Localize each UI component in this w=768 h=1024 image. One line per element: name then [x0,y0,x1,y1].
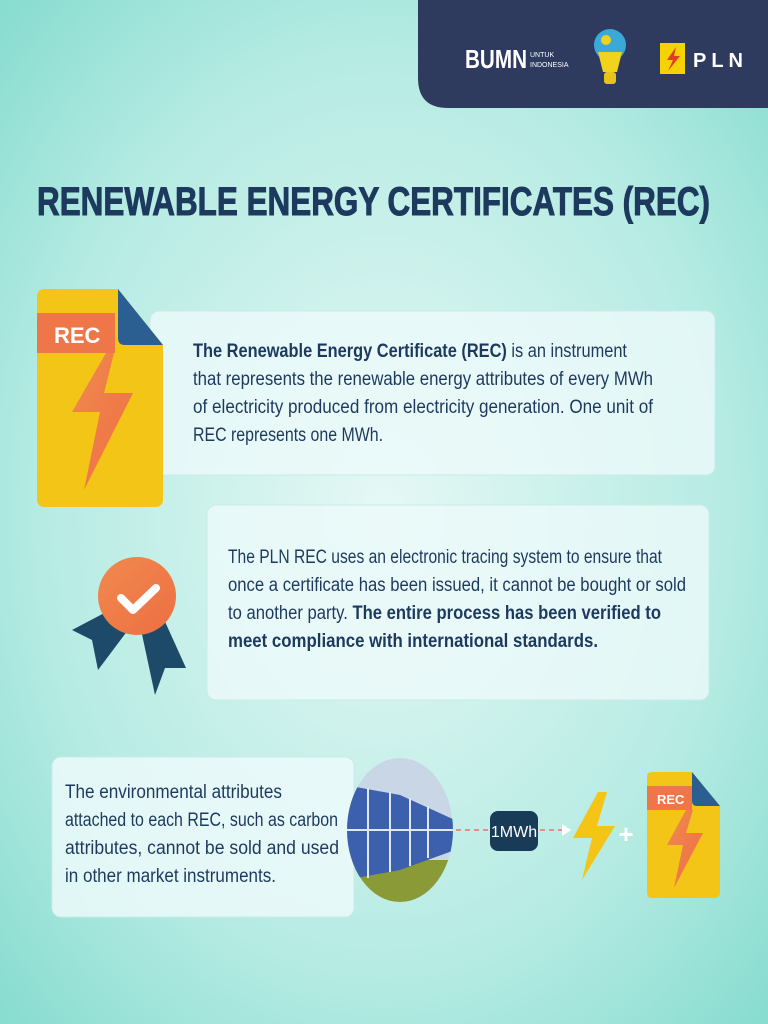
panel: definition [150,311,715,475]
logo: PLN [660,43,748,74]
text: environmental: in other market instruments. [65,866,276,887]
text: tracing: to another party. The entire process has been verified to [228,603,661,624]
text: tracing [228,547,686,652]
icon: REC document small [647,772,720,898]
text: definition [193,341,654,446]
icon: REC document [37,289,163,507]
logo: PLN: PLN [693,50,748,72]
arrow: dashed to lightning [540,824,571,836]
label: 1MWh: 1MWh [491,824,537,841]
text: definition: The Renewable Energy Certificate (REC) is an instrument [193,341,628,362]
text: tracing: The PLN REC uses an electronic tracing system to ensure that [228,547,663,568]
text: environmental: attached to each REC, such as carbon [65,810,338,831]
logo: BUMN: UNTUK [530,52,554,59]
header: logos bar [418,0,768,108]
panel: tracing system [207,505,709,700]
plus sign: + [618,819,634,849]
icon: REC document small: REC [657,792,685,807]
arrow: dashed to 1MWh [456,829,490,831]
text: environmental: attributes, cannot be sold and used [65,838,339,859]
text: environmental [65,782,339,887]
text: definition: of electricity produced from electricity generation. One unit of [193,397,654,418]
text: environmental: The environmental attributes [65,782,282,803]
icon: solar panel photo [345,756,455,906]
icon: REC document: REC [54,323,101,348]
text: definition: that represents the renewable energy attributes of every MWh [193,369,653,390]
label: 1MWh [490,811,538,851]
panel: environmental attributes [52,757,354,917]
text: definition: REC represents one MWh. [193,425,383,446]
text: tracing: once a certificate has been issued, it cannot be bought or sold [228,575,686,596]
text: tracing: meet compliance with international standards. [228,631,598,652]
icon: verified badge [72,557,186,695]
logo: BUMN: INDONESIA [530,62,569,69]
logo: BUMN: BUMN [465,44,527,74]
icon: lightning [573,792,615,880]
logo: bulb [594,29,626,84]
